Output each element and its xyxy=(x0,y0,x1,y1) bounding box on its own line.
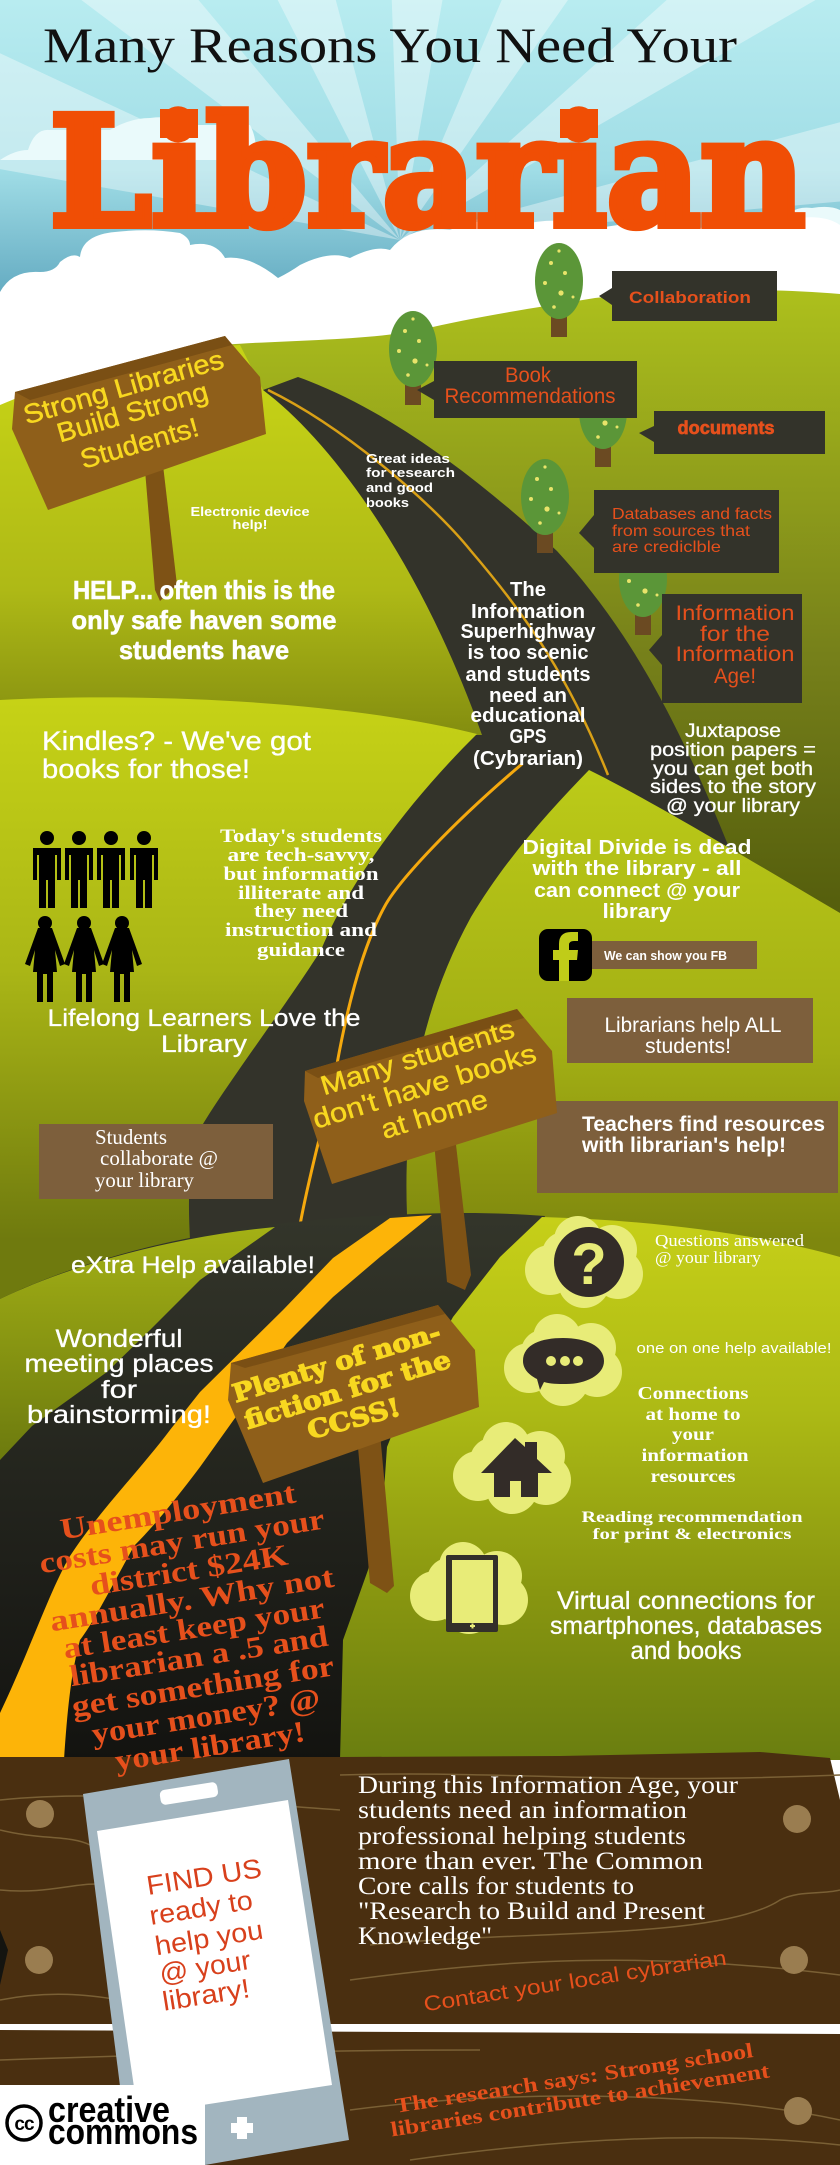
text: questions answered xyxy=(655,1231,805,1267)
sign: many students: don't have books xyxy=(309,1038,540,1135)
text: unemployment: your money? @ xyxy=(89,1682,323,1751)
callout: collaboration: Collaboration xyxy=(629,288,751,307)
text: kindles: books for those! xyxy=(42,754,250,784)
text: great ideas: Great ideas xyxy=(366,451,450,466)
text: tech savvy students: but information xyxy=(224,864,379,885)
creative commons logo: commons xyxy=(48,2111,198,2152)
text: information superhighway: The xyxy=(510,579,546,601)
text: connections at home: information xyxy=(642,1445,748,1465)
icon: question cloud: ? xyxy=(571,1232,607,1297)
text: safe haven xyxy=(72,575,336,665)
text: during this information age: students need an information xyxy=(358,1797,688,1824)
text: tech savvy students: are tech-savvy, xyxy=(228,845,375,866)
phone xyxy=(83,1759,349,2165)
text: digital divide: Digital Divide is dead xyxy=(522,837,752,859)
sign: strong libraries: Students! xyxy=(77,412,202,475)
callout: information age: for the xyxy=(700,623,770,646)
text: during this information age: Core calls for students to xyxy=(358,1873,634,1900)
callout: information age xyxy=(649,594,802,703)
callout: documents: documents xyxy=(678,418,774,438)
text: connections at home: resources xyxy=(650,1466,736,1486)
sign: many students: Many students xyxy=(317,1014,518,1101)
text: unemployment: costs may run your xyxy=(37,1503,327,1580)
callout: book recommendations xyxy=(417,361,637,418)
text: information superhighway: (Cybrarian) xyxy=(473,748,583,770)
sign: many students: at home xyxy=(377,1084,491,1145)
box: students collaborate: your library xyxy=(95,1168,194,1192)
text: kindles: Kindles? - We've got xyxy=(42,726,312,756)
callout: information age: Age! xyxy=(714,665,756,688)
text: unemployment: annually. Why not xyxy=(48,1561,336,1638)
text: lifelong learners: Library xyxy=(161,1031,247,1058)
text: kindles xyxy=(42,726,312,784)
left middle hill xyxy=(0,697,477,1310)
box: teachers: Teachers find resources xyxy=(582,1113,825,1136)
text: great ideas: books xyxy=(366,495,409,510)
text: virtual connections: smartphones, databases xyxy=(550,1612,822,1640)
text: meeting places: brainstorming! xyxy=(27,1401,211,1429)
text: juxtapose: position papers = xyxy=(650,740,816,761)
callout: book recommendations: Recommendations xyxy=(444,385,616,408)
text: during this information age: "Research to Build and Present xyxy=(358,1898,705,1925)
box: teachers xyxy=(537,1101,838,1193)
text: digital divide: with the library - all xyxy=(531,858,742,880)
title: Many Reasons You Need Your xyxy=(43,17,737,73)
text: unemployment: librarian a .5 and xyxy=(67,1620,331,1693)
icon: men xyxy=(33,831,158,908)
text: meeting places: Wonderful xyxy=(56,1325,182,1353)
callout: book recommendations: Book xyxy=(505,364,551,387)
text: meeting places xyxy=(24,1325,214,1429)
text: tech savvy students: guidance xyxy=(257,940,345,961)
sign: strong libraries xyxy=(12,336,266,601)
text: questions answered: @ your library xyxy=(655,1248,762,1267)
front left green patch xyxy=(0,1227,275,1460)
text: juxtapose xyxy=(650,721,817,817)
text: connections at home: at home to xyxy=(646,1404,740,1424)
text: information superhighway: Superhighway xyxy=(460,621,596,643)
text: lifelong learners: Lifelong Learners Love the xyxy=(48,1005,361,1032)
text: juxtapose: Juxtapose xyxy=(685,721,781,742)
clouds xyxy=(0,117,840,420)
text: the research says: libraries contribute to achievement xyxy=(389,2059,771,2141)
phone text: @ your xyxy=(157,1945,253,1989)
facebook label xyxy=(592,941,757,969)
icon: question cloud xyxy=(525,1216,643,1308)
box: librarians help xyxy=(567,998,813,1063)
text: unemployment: your library! xyxy=(113,1715,307,1778)
text: connections at home xyxy=(638,1383,748,1486)
callout: databases: are crediclble xyxy=(612,539,721,556)
text: digital divide xyxy=(522,837,752,923)
callout: information age: Information xyxy=(676,643,794,666)
sign: plenty of non-fiction: CCSS! xyxy=(304,1392,403,1445)
front road xyxy=(0,1213,545,1760)
callout: databases: from sources that xyxy=(612,523,751,540)
wood board footer xyxy=(0,1752,840,2165)
box: students collaborate xyxy=(39,1124,273,1199)
icon: people xyxy=(25,831,158,1002)
callout: databases: Databases and facts xyxy=(612,506,772,523)
sign: many students xyxy=(304,1009,557,1290)
sign: plenty of non-fiction: fiction for the xyxy=(241,1345,454,1435)
text: electronic device help xyxy=(190,504,310,532)
sign: plenty of non-fiction: Plenty of non- xyxy=(229,1317,444,1408)
text: extra help: eXtra Help available! xyxy=(71,1252,315,1279)
back hill xyxy=(200,290,840,1000)
road centre line lower xyxy=(300,764,522,1225)
box: students collaborate: Students xyxy=(95,1125,167,1149)
text: unemployment xyxy=(37,1477,336,1778)
text: the research says: The research says: Strong school xyxy=(393,2038,755,2118)
upper road xyxy=(170,377,730,1245)
text: great ideas: and good xyxy=(366,480,433,495)
text: virtual connections: Virtual connections for xyxy=(557,1587,815,1615)
text: juxtapose: sides to the story xyxy=(650,777,817,798)
phone text: ready to xyxy=(147,1885,255,1931)
text: reading recommendation: Reading recommendation xyxy=(582,1509,803,1526)
icon: tablet cloud xyxy=(410,1542,528,1634)
text: reading recommendation xyxy=(582,1509,803,1543)
text: during this information age xyxy=(358,1772,739,1950)
left upper hill xyxy=(0,345,482,735)
phone text: help you xyxy=(153,1915,265,1961)
box: librarians help: students! xyxy=(645,1035,731,1058)
callout: information age: Information xyxy=(676,602,794,625)
text: meeting places: meeting places xyxy=(24,1350,214,1378)
text: information superhighway: Information xyxy=(471,601,585,623)
phone text: FIND US xyxy=(144,1853,264,1901)
text: tech savvy students: they need xyxy=(254,901,349,922)
icon: house cloud xyxy=(453,1422,571,1514)
title: Librarian: Librarian xyxy=(50,83,805,261)
text: connections at home: your xyxy=(672,1424,714,1444)
front right hill xyxy=(340,1217,840,1760)
text: contact your local cybrarian: Contact your local cybrarian xyxy=(422,1947,728,2016)
facebook label: We can show you FB xyxy=(604,948,727,963)
text: one on one help: one on one help available! xyxy=(636,1340,832,1357)
icon: women xyxy=(25,916,142,1002)
icon: facebook xyxy=(539,929,592,981)
text: information superhighway: and students xyxy=(466,664,590,686)
sky background xyxy=(0,0,840,340)
text: tech savvy students: illiterate and xyxy=(238,883,365,904)
text: juxtapose: @ your library xyxy=(666,796,801,817)
text: great ideas: for research xyxy=(366,465,455,480)
text: great ideas xyxy=(366,451,455,510)
box: students collaborate: collaborate @ xyxy=(100,1146,218,1170)
phone text xyxy=(144,1853,265,2017)
text: during this information age: professional helping students xyxy=(358,1823,686,1850)
road centre line upper xyxy=(268,390,608,775)
text: juxtapose: you can get both xyxy=(653,759,813,780)
phone text: library! xyxy=(160,1973,252,2017)
right middle hill xyxy=(406,770,840,1300)
sign: strong libraries: Build Strong xyxy=(53,376,212,448)
text: meeting places: for xyxy=(101,1376,137,1404)
trees xyxy=(389,243,667,635)
text: unemployment: at least keep your xyxy=(61,1592,327,1665)
box: librarians help: Librarians help ALL xyxy=(604,1014,782,1037)
text: tech savvy students: instruction and xyxy=(225,920,378,941)
text: electronic device help: Electronic device xyxy=(190,504,310,519)
text: information superhighway: GPS xyxy=(510,726,546,748)
text: unemployment: get something for xyxy=(69,1649,336,1724)
text: the research says xyxy=(389,2038,771,2141)
text: virtual connections xyxy=(550,1587,822,1665)
text: lifelong learners xyxy=(48,1005,361,1058)
text: safe haven: only safe haven some xyxy=(72,605,336,635)
text: safe haven: students have xyxy=(119,635,289,665)
yellow road stripe xyxy=(0,1215,432,1760)
text: electronic device help: help! xyxy=(232,517,268,532)
callout: collaboration xyxy=(599,271,777,321)
text: virtual connections: and books xyxy=(630,1637,742,1665)
text: tech savvy students: Today's students xyxy=(220,826,382,847)
text: during this information age: Knowledge" xyxy=(358,1923,492,1950)
creative commons logo xyxy=(0,2085,205,2165)
sign: plenty of non-fiction xyxy=(228,1305,479,1593)
text: information superhighway: need an xyxy=(489,685,567,707)
text: information superhighway: educational xyxy=(470,705,586,727)
icon: chat cloud xyxy=(504,1314,622,1406)
text: tech savvy students xyxy=(220,826,382,961)
callout: documents xyxy=(639,411,825,454)
text: questions answered: Questions answered xyxy=(655,1231,805,1250)
callout: databases xyxy=(579,490,779,573)
nails xyxy=(25,1800,812,2125)
text: unemployment: district $24K xyxy=(88,1538,291,1602)
text: reading recommendation: for print & electronics xyxy=(592,1526,792,1543)
text: information superhighway xyxy=(460,579,596,770)
text: safe haven: HELP... often this is the xyxy=(73,575,335,605)
text: digital divide: can connect @ your xyxy=(534,880,740,902)
creative commons logo: creative xyxy=(48,2089,170,2130)
text: digital divide: library xyxy=(602,901,672,923)
text: during this information age: During this Information Age, your xyxy=(358,1772,739,1799)
text: unemployment: Unemployment xyxy=(58,1477,298,1546)
sign: strong libraries: Strong Libraries xyxy=(20,344,227,430)
text: during this information age: more than ever. The Common xyxy=(358,1848,704,1875)
text: information superhighway: is too scenic xyxy=(468,642,588,664)
box: teachers: with librarian's help! xyxy=(581,1134,786,1157)
creative commons logo: cc xyxy=(14,2114,35,2135)
text: connections at home: Connections xyxy=(638,1383,748,1403)
